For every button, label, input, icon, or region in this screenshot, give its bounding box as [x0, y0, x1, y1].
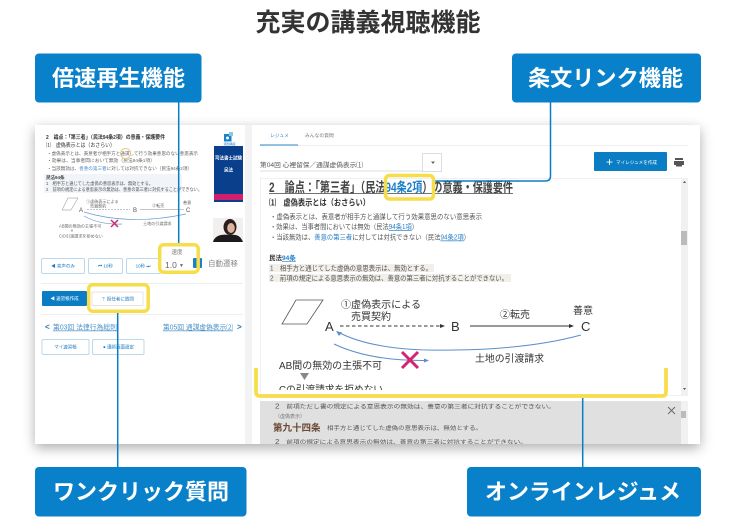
panel: statute reference drawer: 2 前項の規定による意思表示の無効は、善意の第三者に対抗することができない。 — [275, 438, 527, 446]
tabs: みんなの質問 — [305, 132, 334, 139]
chart: false declaration diagram: A — [325, 319, 334, 334]
chart: false declaration diagram: ②転売 — [500, 308, 530, 321]
button: make memo — [42, 291, 87, 306]
panel: course sidebar — [214, 132, 243, 202]
panel: slide text: ・効果は、当事者間において無効（民法94条1項） — [47, 157, 155, 164]
chart: false declaration diagram: B — [451, 319, 460, 334]
panel: slide text: ⑴ 虚偽表示とは（おさらい） — [46, 141, 115, 149]
chart: slide diagram: Cの引渡請求を拒めない — [59, 232, 103, 238]
arrow: speed connector — [178, 102, 180, 244]
statute excerpt — [269, 253, 511, 282]
chart: false declaration diagram: Cの引渡請求を拒めない — [279, 383, 383, 396]
resume bullets — [270, 212, 482, 242]
toggle: auto advance — [193, 258, 238, 268]
button: my notes: マイ速習帳 — [54, 344, 77, 350]
label: speed selector — [159, 245, 198, 272]
chart: slide diagram: AB間の無効の主張不可 — [59, 222, 101, 228]
statute excerpt: 民法94条 — [269, 253, 296, 262]
navigation links: < — [45, 322, 50, 332]
label: playback speed — [35, 54, 202, 102]
arrow: statute link connector — [435, 102, 550, 181]
resume bullets: ・虚偽表示とは、表意者が相手方と通謀して行う効果意思のない意思表示 — [270, 212, 482, 221]
navigation links — [45, 322, 242, 332]
chart: false declaration diagram: 善意 — [573, 304, 593, 317]
panel: statute reference drawer — [260, 401, 688, 446]
arrow: blocked invalidity claim — [334, 344, 425, 361]
arrow: land delivery demand — [338, 332, 581, 350]
button: back 10 seconds — [88, 258, 122, 274]
toggle: auto advance: 自動遷移 — [208, 258, 238, 268]
scrollbar — [681, 178, 688, 395]
chart: slide diagram: A — [79, 208, 83, 214]
chart: slide diagram: B — [133, 208, 137, 214]
icon: logo: 通勤講座 — [224, 141, 236, 146]
panel: lecture screenshot — [35, 125, 700, 446]
resume heading: 2 論点：「第三者」（民法94条2項）の意義・保護要件 — [269, 179, 513, 195]
arrow: question connector — [117, 312, 119, 468]
icon: lecturer video — [213, 218, 243, 242]
navigation links: > — [237, 322, 242, 332]
tabs: レジュメ — [270, 134, 289, 139]
icon: close — [668, 407, 675, 414]
resume subheading: ⑴ 虚偽表示とは（おさらい） — [269, 198, 370, 208]
label: statute link — [512, 54, 701, 102]
resume bullets: ・効果は、当事者間においては無効（民法94条1項） — [270, 222, 418, 231]
button: back 10 seconds: ⏮ 10秒 — [98, 262, 113, 270]
button: make memo: ◀ 速習帳作成 — [50, 295, 79, 302]
panel: statute reference drawer: 2 前項ただし書の規定による意思表示の無効は、善意の第三者に対抗することができない。 — [275, 402, 555, 410]
label: online resume — [467, 467, 701, 516]
chart: slide diagram: ②転売 — [152, 202, 164, 208]
highlight: online resume — [256, 368, 666, 396]
lecture select — [260, 154, 442, 172]
label: one-click question: ワンクリック質問 — [53, 480, 229, 504]
chart: slide diagram: 土地の引渡請求 — [143, 220, 172, 226]
panel: slide text: ・虚偽表示とは、表意者が相手方と通謀して行う効果意思のない意思表示 — [47, 150, 198, 157]
icon: printer — [674, 158, 684, 166]
highlight: speed — [160, 245, 198, 272]
resume bullets: ・当該無効は、善意の第三者に対しては対抗できない（民法94条2項） — [270, 232, 470, 242]
chart: slide diagram: C — [186, 208, 191, 214]
label: online resume: オンラインレジュメ — [485, 480, 681, 504]
chart: slide diagram: ①虚偽表示による — [86, 198, 119, 204]
chart: slide diagram: ▼ — [70, 228, 74, 233]
button: forward 10 seconds — [126, 258, 160, 274]
button: create my resume: マイレジュメを作成 — [616, 159, 658, 166]
panel: online resume — [260, 178, 688, 396]
label: one-click question — [35, 467, 246, 516]
navigation links: 第05回 通謀虚偽表示⑵ — [163, 322, 233, 332]
chart: false declaration diagram: AB間の無効の主張不可 — [279, 359, 382, 372]
lecture select: 第04回 心裡留保／通謀虚偽表示⑴ — [260, 160, 364, 169]
tabs — [260, 132, 688, 146]
button: ask lecturer: ？ 担任者に質問 — [101, 296, 134, 302]
panel: statute reference drawer: 第九十四条 — [273, 422, 321, 434]
label: statute link: 条文リンク機能 — [528, 66, 683, 91]
statute excerpt: 1 相手方と通じてした虚偽の意思表示は、無効とする。 — [270, 264, 432, 272]
highlight: question — [89, 285, 148, 311]
panel: course sidebar: 民法 — [224, 166, 233, 174]
chart: false declaration diagram — [279, 298, 593, 396]
panel: slide text — [44, 133, 202, 193]
label: speed selector: 1.0 — [165, 260, 177, 270]
panel: slide text: 2 前項の規定による意思表示の無効は、善意の第三者に対抗することができない。 — [46, 186, 202, 193]
label: playback speed: 倍速再生機能 — [52, 66, 185, 91]
panel: slide text: 民法94条 — [46, 174, 65, 181]
panel: player controls — [42, 245, 238, 274]
navigation links: 第03回 法律行為総則 — [53, 322, 117, 332]
button: audio only — [42, 258, 84, 274]
panel: slide text: 2 論点：「第三者」（民法94条2項）の意義・保護要件 — [46, 133, 165, 141]
button: lecture settings — [92, 340, 144, 354]
panel: slide text: 1 相手方と通じてした虚偽の意思表示は、無効とする。 — [46, 180, 153, 187]
panel: course sidebar: 司法書士試験 — [215, 154, 242, 162]
button: create my resume — [594, 152, 667, 171]
button: forward 10 seconds: 10秒 ⏭ — [136, 262, 150, 270]
button: ask lecturer — [92, 292, 143, 306]
chart: slide diagram — [59, 198, 191, 238]
arrow: resume connector — [582, 398, 584, 468]
chart: slide diagram: 善意 — [183, 199, 191, 205]
label: speed selector: 速度 — [171, 248, 183, 256]
chart: false declaration diagram: C — [581, 319, 590, 334]
panel: slide text: ・当該無効は、善意の第三者に対しては対抗できない（民法94条2項） — [47, 165, 192, 172]
title: 充実の講義視聴機能 — [256, 9, 480, 37]
chart: slide diagram: 売買契約 — [90, 202, 106, 208]
button: my notes — [42, 340, 89, 354]
button: create my resume: + — [606, 155, 613, 169]
panel: statute reference drawer: 相手方と通じてした虚偽の意思表示は、無効とする。 — [327, 424, 482, 432]
icon: cross mark — [402, 352, 418, 368]
button: lecture settings: ● 講師画面設定 — [103, 344, 134, 350]
chart: false declaration diagram: ①虚偽表示による — [341, 298, 421, 311]
button: audio only: ◀ 音声のみ — [51, 262, 75, 270]
highlight: statute link — [386, 176, 434, 199]
panel: statute reference drawer: （虚偽表示） — [275, 413, 305, 420]
icon: land parcel — [282, 300, 323, 324]
statute excerpt: 2 前項の規定による意思表示の無効は、善意の第三者に対抗することができない。 — [270, 274, 508, 282]
label: speed selector: ▼ — [179, 263, 184, 269]
chart: false declaration diagram: 土地の引渡請求 — [475, 352, 544, 365]
chart: false declaration diagram: 売買契約 — [351, 310, 391, 323]
